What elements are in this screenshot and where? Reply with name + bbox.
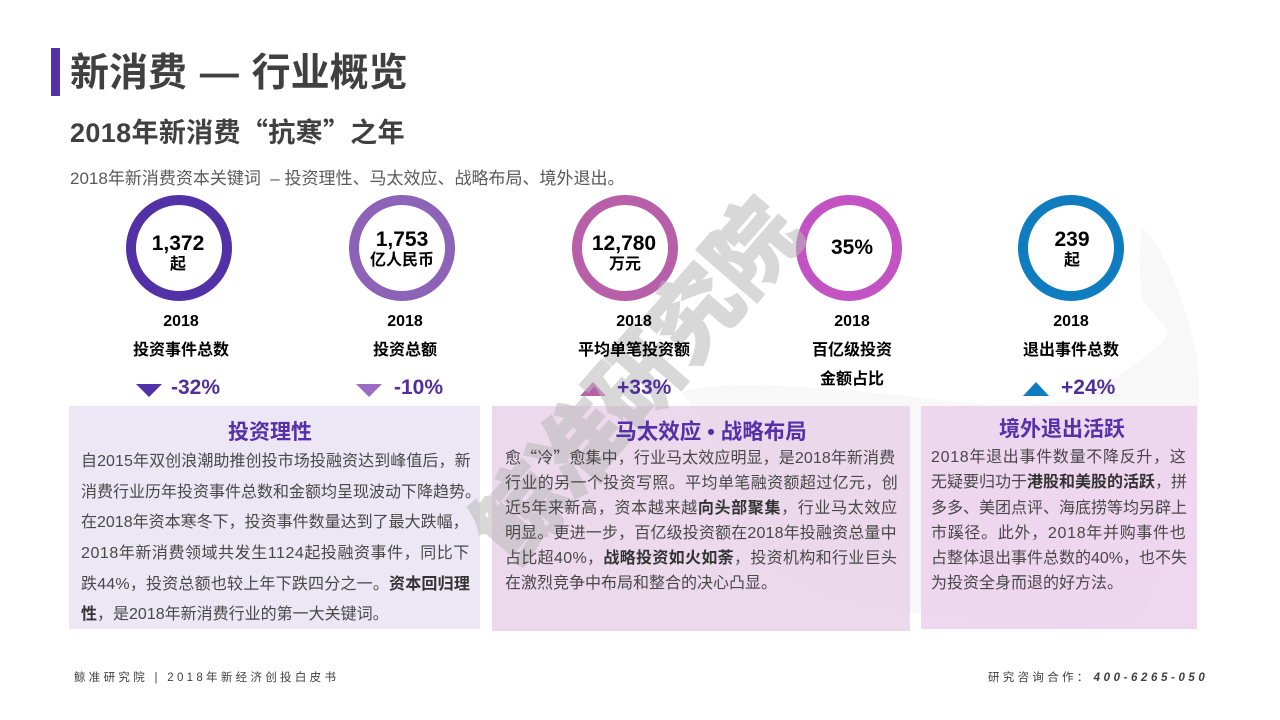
value 4: 35% — [831, 236, 873, 259]
stat: investment events — [126, 195, 232, 399]
unit 5: 起 — [1064, 252, 1080, 269]
label 3: 平均单笔投资额 — [578, 342, 690, 359]
panel body text — [931, 448, 1187, 592]
panel body text: 自2015年双创浪潮助推创投市场投融资达到峰值后，新 — [81, 453, 471, 470]
keywords line: 2018年新消费资本关键词 – 投资理性、马太效应、战略布局、境外退出。 — [70, 169, 624, 188]
label 5: 退出事件总数 — [1023, 342, 1119, 359]
year 1: 2018 — [163, 313, 199, 330]
stat: average deal size — [572, 195, 690, 399]
panel body text: 在激烈竞争中布局和整合的决心凸显。 — [505, 575, 777, 592]
up arrow 3 — [580, 382, 606, 396]
panel: rational investment — [69, 406, 480, 629]
panel body text: 行业的另一个投资写照。平均单笔融资额超过亿元，创 — [505, 475, 898, 492]
change 1: -32% — [171, 376, 220, 399]
ring 1 — [126, 195, 232, 301]
panel body text: 占整体退出事件总数的40%，也不失 — [931, 550, 1187, 567]
panel body text — [505, 444, 898, 592]
label 1: 投资事件总数 — [133, 342, 229, 359]
title: 新消费 — 行业概览 — [70, 52, 408, 95]
change 2: -10% — [394, 376, 443, 399]
value 5: 239 — [1054, 228, 1090, 251]
ring 2 — [349, 195, 455, 301]
ring 4 — [796, 195, 902, 301]
panel body text: 2018年退出事件数量不降反升，这 — [931, 449, 1186, 466]
panel body text: 占比超40%，战略投资如火如荼，投资机构和行业巨头 — [505, 550, 897, 567]
year 4: 2018 — [834, 313, 870, 330]
panel heading: 马太效应 • 战略布局 — [615, 420, 807, 444]
panel body text: 在2018年资本寒冬下，投资事件数量达到了最大跌幅， — [81, 514, 469, 531]
panel body text: 市蹊径。此外，2018年并购事件也 — [931, 525, 1186, 542]
ring 3 — [572, 195, 678, 301]
value 3: 12,780 — [592, 232, 656, 255]
panel: overseas exits — [921, 406, 1197, 629]
panel body text: 为投资全身而退的好方法。 — [931, 575, 1123, 592]
panel body text — [81, 452, 481, 623]
stat: 10-billion-level share — [796, 195, 902, 388]
panel body text: 性，是2018年新消费行业的第一大关键词。 — [81, 606, 389, 623]
panel body text: 近5年来新高，资本越来越向头部聚集，行业马太效应 — [505, 500, 898, 517]
panel body text: 愈“冷”愈集中，行业马太效应明显，是2018年新消费 — [505, 444, 895, 468]
title accent bar — [51, 48, 60, 96]
footer right: 研究咨询合作：400-6265-050 — [988, 672, 1208, 684]
value 1: 1,372 — [152, 232, 204, 255]
year 3: 2018 — [616, 313, 652, 330]
value 2: 1,753 — [376, 228, 428, 251]
panel heading: 投资理性 — [228, 421, 312, 444]
stat: total investment — [349, 195, 455, 399]
label 2: 投资总额 — [373, 342, 437, 359]
year 2: 2018 — [387, 313, 423, 330]
up arrow 5 — [1023, 382, 1049, 396]
panel body text: 多多、美团点评、海底捞等均另辟上 — [931, 500, 1187, 517]
year 5: 2018 — [1053, 313, 1089, 330]
unit 3: 万元 — [609, 256, 641, 273]
label 4 line 2: 金额占比 — [820, 371, 884, 388]
panel body text: 2018年新消费领域共发生1124起投融资事件，同比下 — [81, 545, 470, 562]
label 4: 百亿级投资 — [812, 342, 892, 359]
subtitle: 2018年新消费“抗寒”之年 — [70, 111, 405, 150]
watermark: 鲸准研究院 — [456, 182, 819, 579]
down arrow 2 — [356, 384, 382, 397]
ring 5 — [1018, 195, 1124, 301]
panel body text: 跌44%，投资总额也较上年下跌四分之一。资本回归理 — [81, 576, 470, 593]
panel body text: 明显。更进一步，百亿级投资额在2018年投融资总量中 — [505, 525, 897, 542]
panel body text: 消费行业历年投资事件总数和金额均呈现波动下降趋势。 — [81, 484, 481, 501]
panel heading: 境外退出活跃 — [999, 418, 1125, 441]
stat: exit events — [1018, 195, 1124, 399]
change 3: +33% — [617, 376, 671, 399]
down arrow 1 — [136, 384, 162, 397]
change 5: +24% — [1061, 376, 1115, 399]
panel body text: 无疑要归功于港股和美股的活跃，拼 — [931, 474, 1187, 491]
footer left: 鲸准研究院 | 2018年新经济创投白皮书 — [74, 672, 339, 684]
panel: Matthew effect and strategic layout — [492, 406, 910, 631]
unit 2: 亿人民币 — [370, 252, 434, 269]
unit 1: 起 — [170, 256, 186, 273]
